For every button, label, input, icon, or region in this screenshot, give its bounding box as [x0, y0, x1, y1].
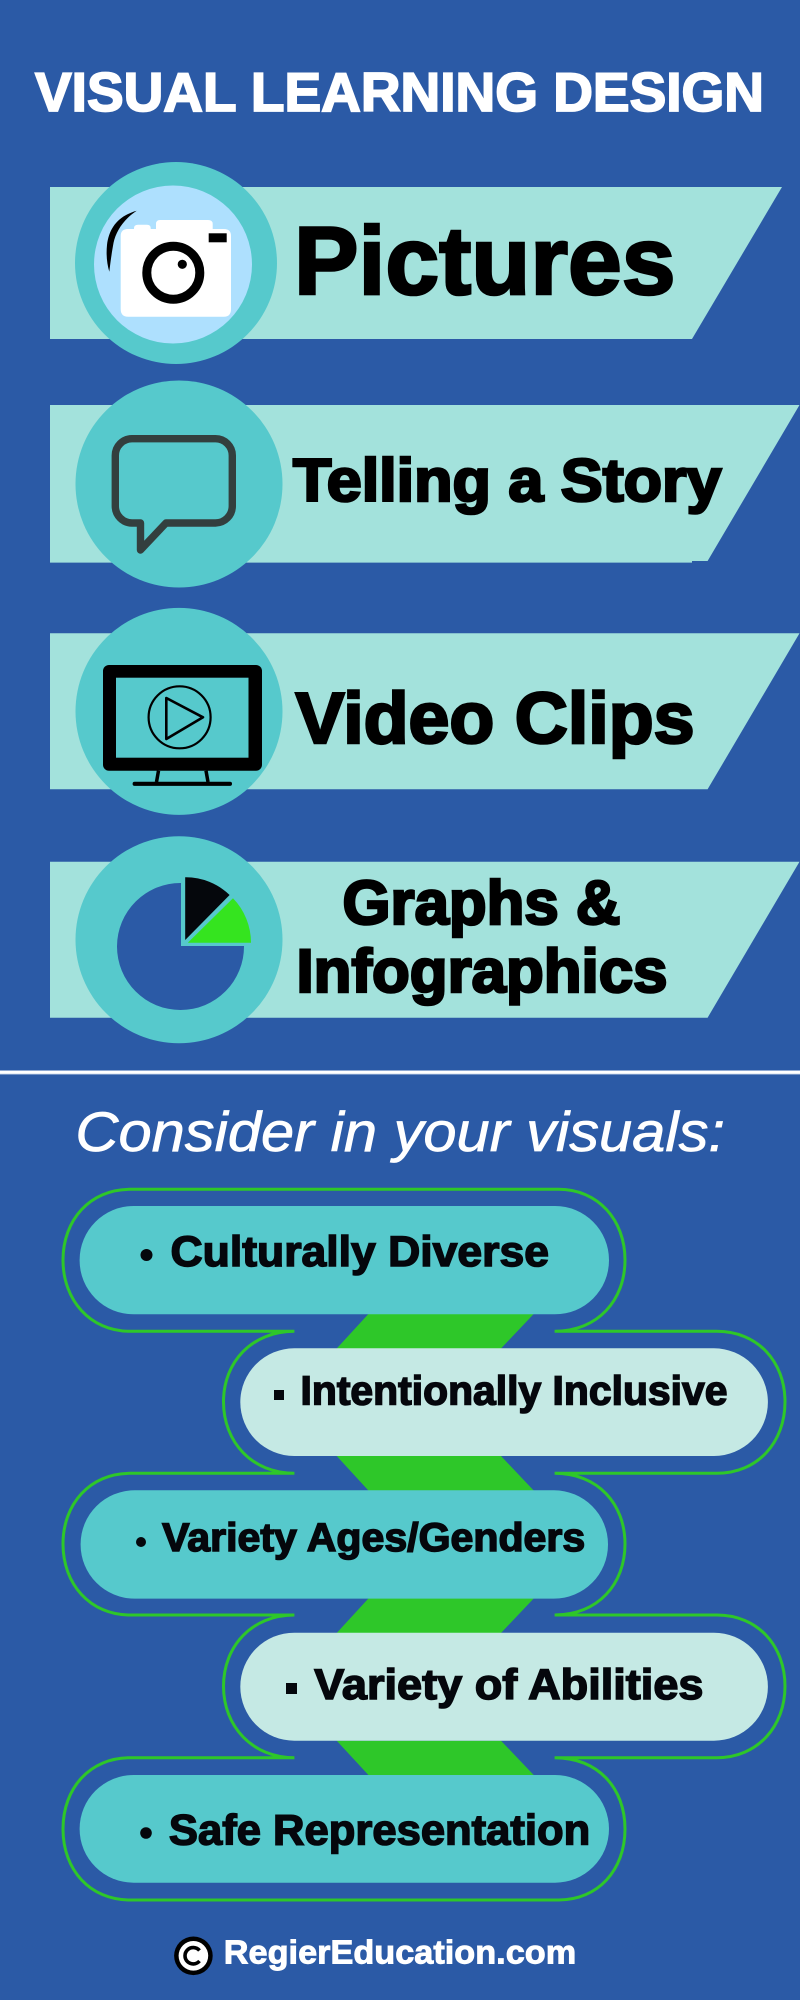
item: variety ages and genders: Variety Ages/Genders	[162, 1516, 585, 1560]
credit text: RegierEducation.com	[224, 1934, 576, 1970]
icon: monitor with play button	[103, 665, 262, 786]
heading: consider in your visuals: Consider in your visuals:	[75, 1100, 725, 1163]
item: variety ages and genders	[81, 1490, 608, 1599]
item: safe representation: Safe Representation	[169, 1806, 590, 1854]
panel: graphs and infographics	[50, 836, 800, 1043]
footer	[174, 1934, 576, 1975]
panel: considerations list	[63, 1189, 785, 1900]
panel: pictures	[50, 162, 782, 364]
panel: telling a story	[50, 380, 800, 588]
green connectors	[337, 1314, 534, 1775]
label: infographics: Infographics	[296, 937, 668, 1006]
panel: video clips	[50, 608, 800, 815]
icon circle: graphs	[76, 836, 282, 1043]
item: intentionally inclusive	[240, 1348, 768, 1456]
item: culturally diverse: Culturally Diverse	[170, 1228, 549, 1276]
icon: copyright	[174, 1936, 213, 1975]
label: graphs: Graphs &	[342, 869, 620, 938]
label: pictures: Pictures	[294, 208, 676, 315]
icon: speech bubble	[115, 439, 232, 550]
icon: camera	[94, 186, 252, 344]
item: variety of abilities	[240, 1633, 768, 1741]
icon: pie chart	[117, 877, 251, 1010]
title: VISUAL LEARNING DESIGN	[35, 62, 764, 123]
green outline	[63, 1189, 785, 1900]
item: culturally diverse	[80, 1206, 609, 1314]
label: video: Video Clips	[296, 678, 694, 759]
banner: graphs	[50, 862, 800, 1018]
item: variety of abilities: Variety of Abilities	[314, 1661, 704, 1709]
banner: story	[50, 405, 800, 563]
icon circle: story	[76, 380, 282, 588]
banner: video	[50, 633, 800, 789]
item: safe representation	[80, 1775, 609, 1883]
item: intentionally inclusive: Intentionally Inclusive	[300, 1368, 728, 1414]
icon circle: video	[76, 608, 282, 815]
label: story: Telling a Story	[293, 447, 722, 514]
icon circle: pictures	[75, 162, 277, 364]
banner: pictures	[50, 187, 782, 339]
